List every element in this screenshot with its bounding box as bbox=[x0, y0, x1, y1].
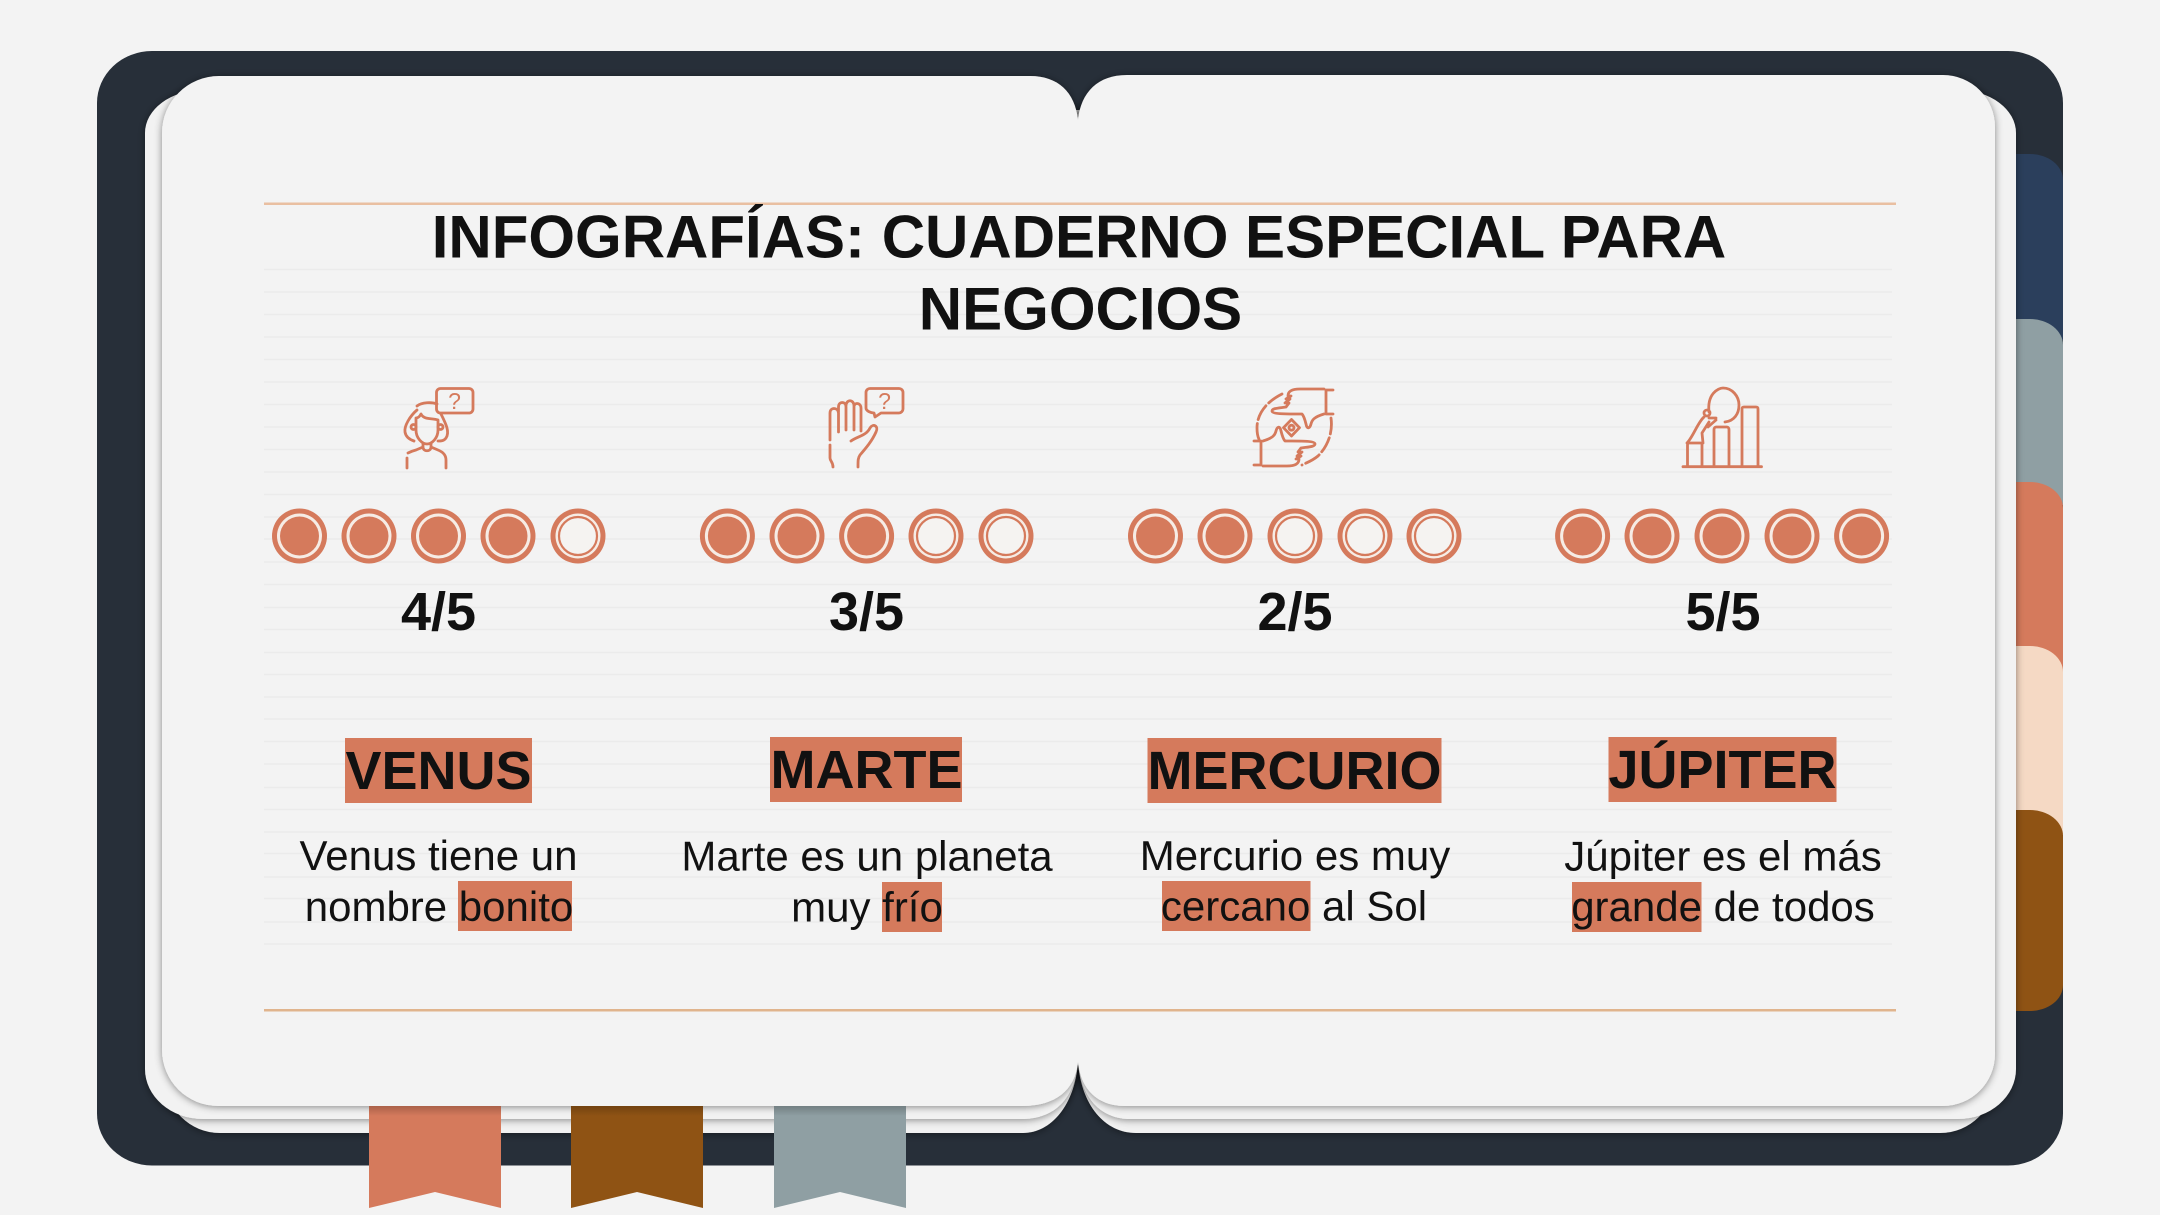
tab: navy bbox=[1980, 154, 2063, 340]
tab: peach bbox=[1980, 646, 2063, 835]
bottom rule bbox=[264, 1009, 1896, 1012]
score: 2/5 bbox=[1257, 582, 1333, 642]
icon: raised hand with question bubble: ? bbox=[878, 388, 891, 414]
index tabs bbox=[1980, 154, 2063, 1011]
rating dots: 4 of 5 bbox=[272, 508, 606, 564]
tab: grey bbox=[1980, 319, 2063, 505]
title bbox=[432, 204, 1726, 342]
name highlight: JÚPITER bbox=[1608, 740, 1837, 800]
ribbon: brown bbox=[571, 1106, 703, 1208]
page stack: top sheet bbox=[162, 75, 1995, 1106]
description bbox=[300, 832, 577, 931]
column: Mercurio bbox=[1128, 389, 1462, 931]
description: Venus tiene un bbox=[300, 832, 577, 879]
ruled notebook lines bbox=[264, 270, 1892, 944]
description: cercano al Sol bbox=[1161, 882, 1427, 930]
description bbox=[1564, 832, 1882, 932]
icon: hands around globe bbox=[1254, 389, 1333, 466]
column: Júpiter bbox=[1555, 388, 1889, 932]
description: muy frío bbox=[791, 884, 943, 930]
page stack: middle sheet bbox=[145, 90, 2016, 1119]
ribbon: grey bbox=[774, 1106, 906, 1208]
name highlight: MERCURIO bbox=[1148, 741, 1442, 801]
name highlight: VENUS bbox=[345, 741, 532, 801]
description: Marte es un planeta bbox=[681, 832, 1053, 880]
description: nombre bonito bbox=[305, 883, 573, 930]
icon: person pushing ball up a bar chart bbox=[1683, 388, 1762, 467]
score: 4/5 bbox=[401, 582, 476, 642]
title: INFOGRAFÍAS: CUADERNO ESPECIAL PARA bbox=[432, 204, 1726, 271]
column: Venus bbox=[272, 388, 606, 931]
tab: brown bbox=[1980, 810, 2063, 1011]
bookmark ribbons bbox=[369, 1106, 906, 1208]
score: 5/5 bbox=[1685, 582, 1761, 642]
name highlight: MARTE bbox=[771, 740, 962, 800]
description bbox=[681, 832, 1053, 932]
rating dots: 3 of 5 bbox=[700, 508, 1034, 564]
tab: salmon bbox=[1980, 482, 2063, 672]
description bbox=[1140, 832, 1450, 931]
ribbon: salmon bbox=[369, 1106, 501, 1208]
description: Mercurio es muy bbox=[1140, 832, 1450, 879]
page stack: bottom sheet bbox=[165, 110, 1995, 1133]
description: grande de todos bbox=[1571, 883, 1875, 930]
column: Marte bbox=[681, 388, 1053, 932]
rating dots: 5 of 5 bbox=[1555, 508, 1889, 564]
description: Júpiter es el más bbox=[1564, 832, 1882, 880]
icon: woman with question bubble bbox=[405, 388, 473, 468]
title: NEGOCIOS bbox=[919, 275, 1242, 342]
icon: raised hand with question bubble bbox=[830, 388, 903, 467]
icon: woman with question bubble: ? bbox=[448, 388, 461, 414]
top rule bbox=[264, 202, 1896, 205]
score: 3/5 bbox=[829, 582, 904, 642]
rating dots: 2 of 5 bbox=[1128, 508, 1462, 564]
